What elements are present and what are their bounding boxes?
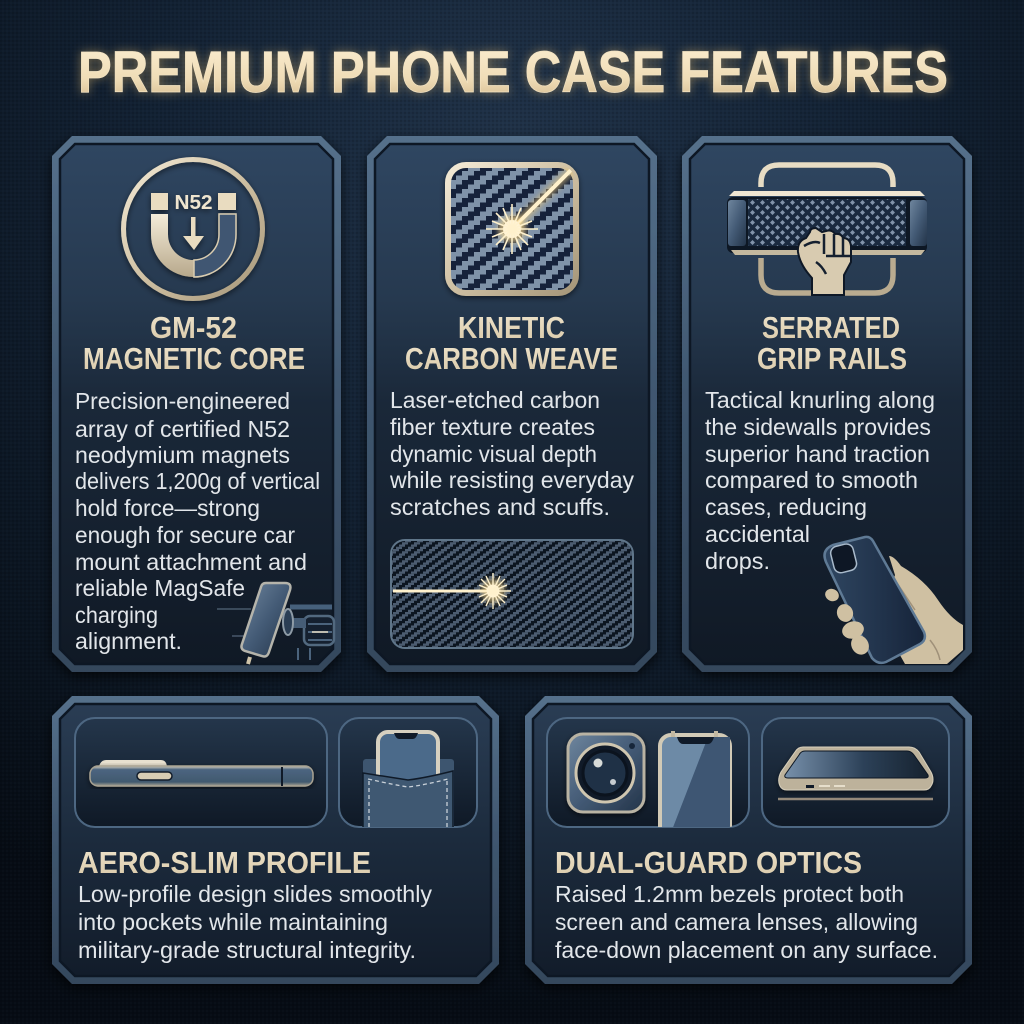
body text: Precision-engineered bbox=[75, 388, 290, 414]
heading: GRIP RAILS bbox=[757, 342, 907, 376]
icon: carbon tile with laser bbox=[448, 165, 576, 293]
body text: delivers 1,200g of vertical bbox=[75, 468, 320, 494]
icon: hand holding phone bbox=[823, 537, 963, 664]
body text: enough for secure car bbox=[75, 522, 295, 548]
body text: charging bbox=[75, 602, 158, 628]
body text: accidental bbox=[705, 521, 810, 547]
body text: drops. bbox=[705, 548, 770, 574]
heading: MAGNETIC CORE bbox=[83, 342, 305, 376]
heading: DUAL-GUARD OPTICS bbox=[555, 846, 862, 880]
body text: face-down placement on any surface. bbox=[555, 937, 938, 963]
panel: kinetic carbon weave bbox=[367, 136, 657, 672]
panel: serrated grip rails bbox=[682, 136, 972, 672]
heading: AERO-SLIM PROFILE bbox=[78, 846, 371, 880]
body text: alignment. bbox=[75, 628, 182, 654]
icon: N52 horseshoe magnet: N52 bbox=[174, 192, 212, 214]
icon: grip rail and fist bbox=[727, 165, 927, 295]
body text: neodymium magnets bbox=[75, 442, 290, 468]
body text: array of certified N52 bbox=[75, 416, 290, 442]
icon: phone on car vent mount bbox=[217, 583, 334, 664]
heading: KINETIC bbox=[458, 311, 565, 345]
body text: compared to smooth bbox=[705, 467, 918, 493]
body text bbox=[555, 881, 938, 963]
heading bbox=[757, 311, 907, 376]
panel: aero-slim profile bbox=[52, 696, 499, 984]
body text: into pockets while maintaining bbox=[78, 909, 388, 935]
body text: the sidewalls provides bbox=[705, 414, 931, 440]
panel: GM-52 magnetic core bbox=[52, 136, 341, 672]
image: phone in jeans pocket bbox=[339, 718, 477, 829]
image: slim phone side view bbox=[75, 718, 327, 827]
image: phone laid face-down with raised bezel bbox=[762, 718, 949, 827]
body text bbox=[389, 387, 634, 520]
heading: CARBON WEAVE bbox=[405, 342, 618, 376]
body text bbox=[75, 388, 320, 654]
body text: mount attachment and bbox=[75, 549, 307, 575]
body text: cases, reducing bbox=[705, 494, 867, 520]
body text: screen and camera lenses, allowing bbox=[555, 909, 918, 935]
body text: superior hand traction bbox=[705, 441, 930, 467]
image: etched carbon swatch bbox=[391, 540, 633, 648]
body text bbox=[705, 387, 935, 574]
body text: Tactical knurling along bbox=[705, 387, 935, 413]
body text: military-grade structural integrity. bbox=[78, 937, 416, 963]
body text: Raised 1.2mm bezels protect both bbox=[555, 881, 904, 907]
icon: N52 horseshoe magnet bbox=[124, 160, 262, 298]
body text: while resisting everyday bbox=[389, 467, 634, 493]
image: camera lens and phone screen bezels bbox=[546, 717, 750, 828]
body text: reliable MagSafe bbox=[75, 575, 245, 601]
body text: fiber texture creates bbox=[390, 414, 595, 440]
body text: scratches and scuffs. bbox=[390, 494, 610, 520]
body text: dynamic visual depth bbox=[390, 441, 597, 467]
heading bbox=[83, 311, 305, 376]
body text: hold force—strong bbox=[75, 495, 260, 521]
body text: Low-profile design slides smoothly bbox=[78, 881, 433, 907]
heading bbox=[405, 311, 618, 376]
heading: GM-52 bbox=[150, 311, 237, 345]
body text: Laser-etched carbon bbox=[390, 387, 600, 413]
heading: SERRATED bbox=[762, 311, 900, 345]
body text bbox=[78, 881, 433, 963]
panel: dual-guard optics bbox=[525, 696, 972, 984]
